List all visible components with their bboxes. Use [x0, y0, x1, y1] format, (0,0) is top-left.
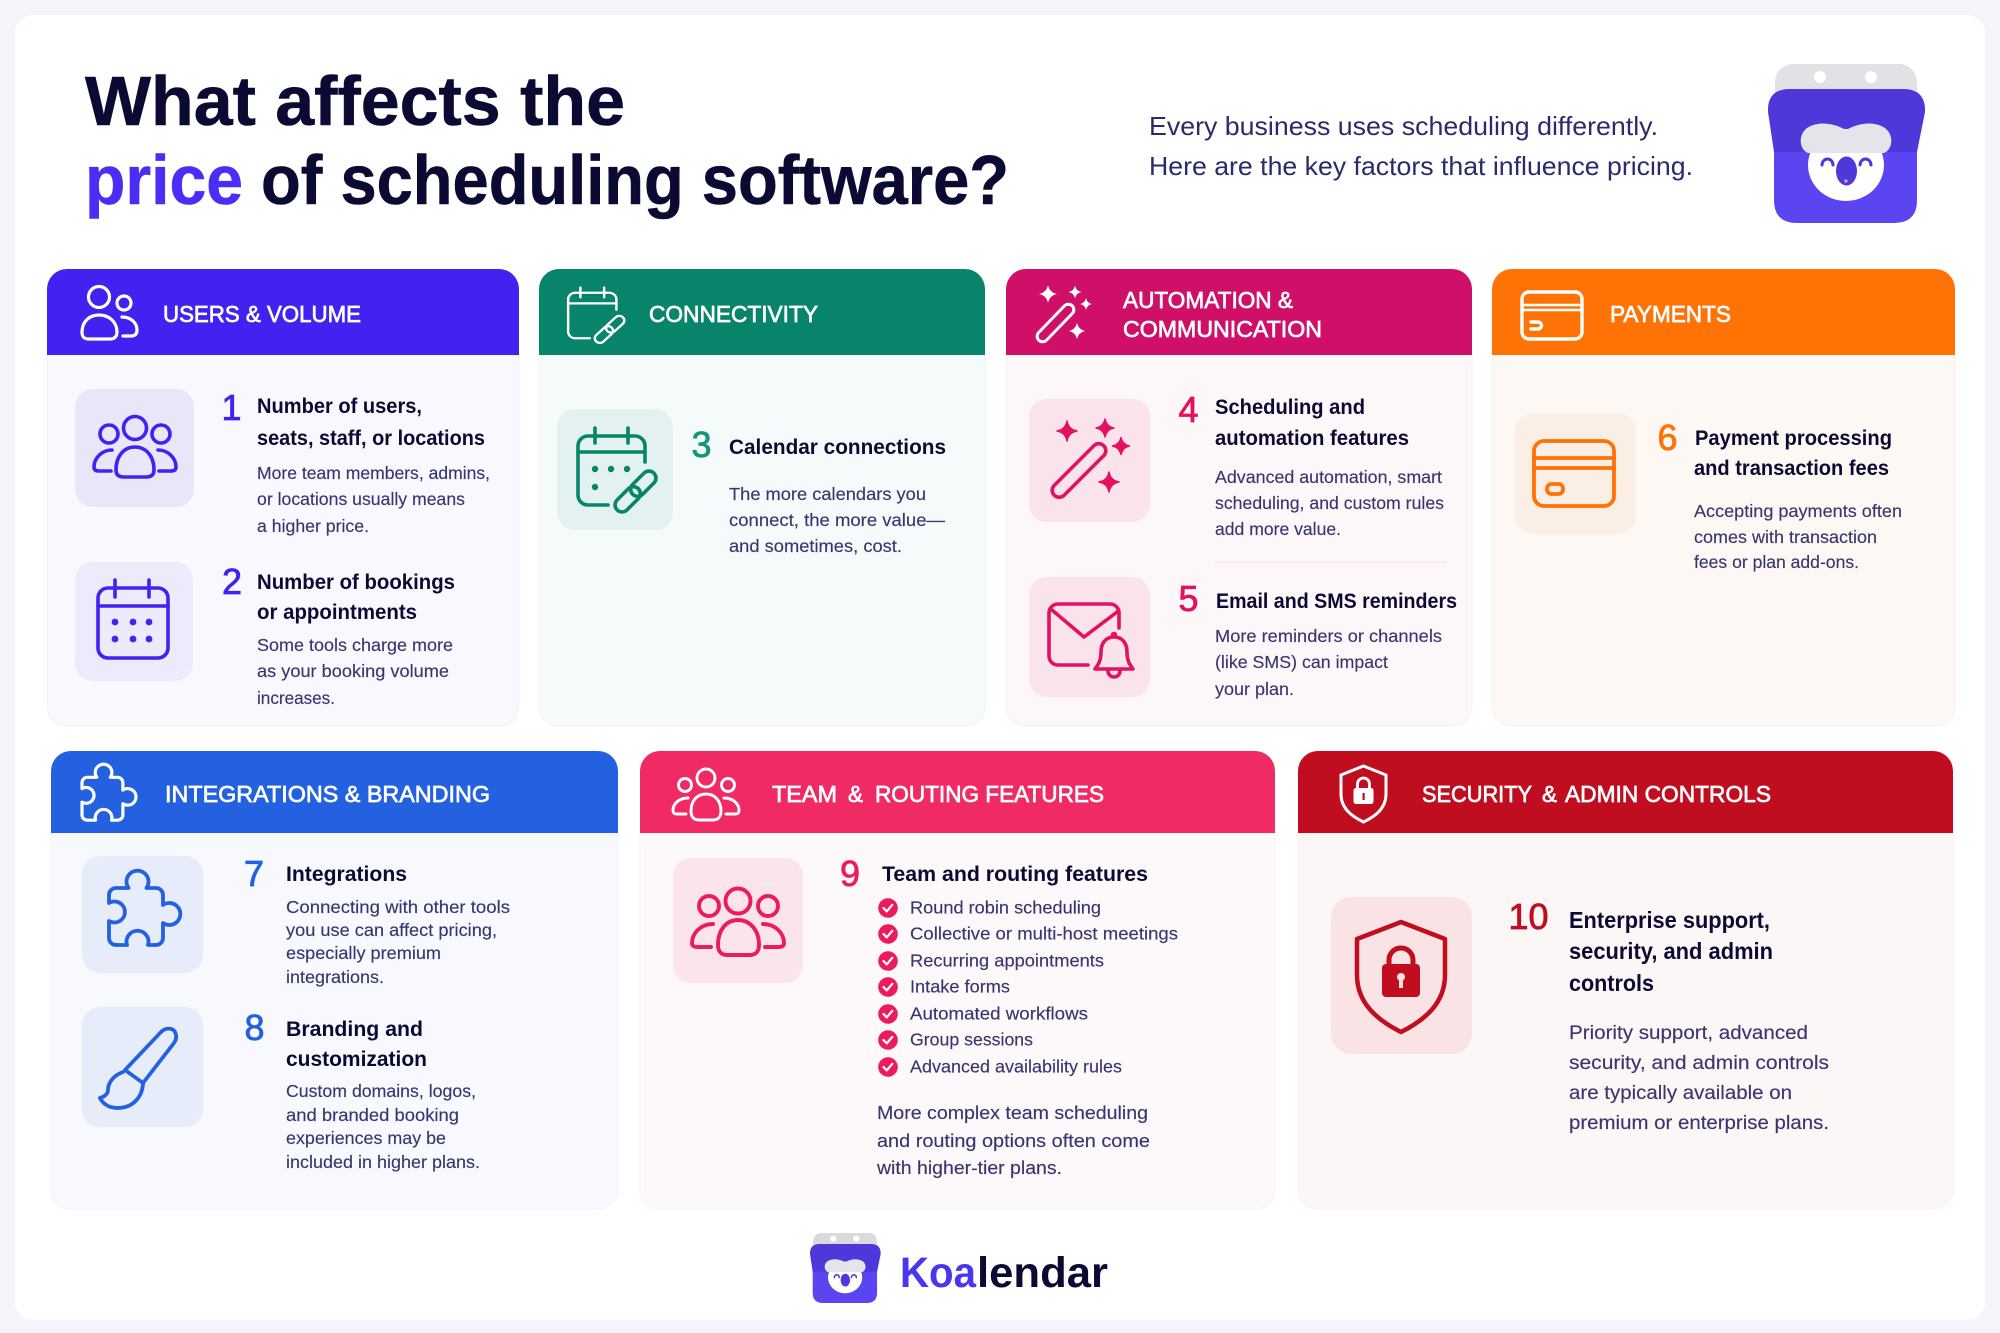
- panel: payments: [1492, 269, 1955, 726]
- factor 10: 10: [1508, 896, 1548, 937]
- factor 6: and transaction fees: [1694, 457, 1889, 480]
- panel: automation and communication: [1006, 269, 1472, 726]
- factor 9: Team and routing features: [882, 863, 1148, 886]
- title: of scheduling software?: [261, 141, 1009, 219]
- header: integrations and branding: [51, 751, 618, 833]
- header: integrations and branding: INTEGRATIONS & BRANDING: [165, 781, 490, 807]
- icon box: credit card: [1515, 413, 1636, 534]
- factor 10: security, and admin controls: [1569, 1052, 1829, 1074]
- icon: Koalendar koala calendar logo: [1768, 64, 1925, 223]
- footer wordmark: [900, 1249, 1108, 1297]
- factor 2: 2: [222, 561, 242, 602]
- factor 5: Email and SMS reminders: [1216, 590, 1457, 613]
- footer wordmark: lendar: [977, 1249, 1108, 1297]
- icon: group of people: [673, 769, 739, 820]
- icon box: magic wand: [1029, 399, 1150, 522]
- panel: users and volume: [47, 269, 519, 726]
- icon box: group of people: [673, 858, 803, 983]
- checklist: Advanced availability rules: [910, 1057, 1122, 1077]
- factor 1: a higher price.: [257, 516, 369, 536]
- factor 1: or locations usually means: [257, 489, 465, 509]
- factor 1: [221, 387, 490, 536]
- factor 6: fees or plan add-ons.: [1694, 552, 1859, 572]
- header: payments: [1492, 269, 1955, 355]
- icon box: email with bell: [1029, 577, 1150, 697]
- panel: integrations and branding: [51, 751, 618, 1209]
- factor 10: security, and admin: [1569, 938, 1773, 964]
- icon: calendar with link: [568, 287, 626, 345]
- team features note: [876, 1102, 1150, 1178]
- checklist: [878, 898, 1178, 1077]
- factor 3: The more calendars you: [729, 484, 926, 504]
- factor 10: are typically available on: [1569, 1082, 1792, 1104]
- icon: shield with lock: [1341, 766, 1386, 822]
- tagline: [1149, 111, 1693, 181]
- factor 5: your plan.: [1215, 679, 1294, 699]
- factor 1: More team members, admins,: [257, 463, 490, 483]
- checklist: Round robin scheduling: [910, 898, 1101, 918]
- header: security and admin controls: ADMIN CONTROLS: [1565, 781, 1771, 807]
- icon: magic wand: [1035, 285, 1092, 344]
- factor 9: 9: [840, 853, 860, 894]
- factor 8: [244, 1007, 480, 1172]
- header: team and routing features: &: [848, 781, 863, 807]
- factor 3: connect, the more value—: [729, 510, 946, 530]
- factor 4: Scheduling and: [1215, 396, 1365, 419]
- team features note: with higher-tier plans.: [876, 1157, 1062, 1178]
- factor 5: 5: [1178, 578, 1199, 619]
- team features note: More complex team scheduling: [877, 1102, 1148, 1123]
- factor 6: 6: [1657, 417, 1678, 458]
- factor 1: Number of users,: [257, 395, 422, 418]
- header: security and admin controls: SECURITY: [1422, 781, 1532, 807]
- checklist: Recurring appointments: [910, 951, 1104, 971]
- factor 10: Enterprise support,: [1569, 907, 1770, 933]
- factor 4: automation features: [1215, 427, 1409, 450]
- factor 2: Some tools charge more: [257, 635, 453, 655]
- title: [85, 62, 1009, 219]
- factor 8: included in higher plans.: [286, 1152, 480, 1172]
- factor 7: Connecting with other tools: [286, 897, 510, 917]
- factor 8: experiences may be: [286, 1128, 446, 1148]
- checklist: Automated workflows: [910, 1004, 1088, 1024]
- icon box: paint brush: [82, 1007, 203, 1127]
- header: connectivity: [539, 269, 985, 355]
- factor 8: Custom domains, logos,: [286, 1081, 476, 1101]
- factor 4: [1178, 389, 1444, 539]
- tagline: Here are the key factors that influence pricing.: [1149, 151, 1693, 181]
- icon: two people: [82, 286, 137, 339]
- title: price: [85, 141, 243, 219]
- icon box: group of people: [75, 389, 194, 507]
- factor 10: premium or enterprise plans.: [1569, 1112, 1829, 1134]
- factor 5: (like SMS) can impact: [1215, 652, 1388, 672]
- factor 3: Calendar connections: [729, 436, 946, 459]
- team features note: and routing options often come: [877, 1130, 1150, 1151]
- checklist: Group sessions: [910, 1030, 1033, 1050]
- factor 3: [691, 424, 946, 556]
- factor 7: Integrations: [286, 863, 407, 886]
- factor 4: add more value.: [1215, 519, 1341, 539]
- factor 2: [222, 561, 455, 708]
- header: users and volume: [47, 269, 519, 355]
- header: connectivity: CONNECTIVITY: [649, 301, 818, 327]
- factor 3: 3: [691, 424, 712, 465]
- title: What affects the: [85, 62, 625, 140]
- factor 1: seats, staff, or locations: [257, 427, 485, 450]
- header: team and routing features: TEAM: [772, 781, 837, 807]
- factor 7: especially premium: [286, 943, 441, 963]
- checklist: Collective or multi-host meetings: [910, 924, 1178, 944]
- factor 8: Branding and: [286, 1018, 423, 1041]
- header: team and routing features: [640, 751, 1275, 833]
- factor 9: [840, 853, 1148, 894]
- checklist: Intake forms: [910, 977, 1010, 997]
- factor 7: [244, 853, 510, 987]
- icon: credit card: [1522, 292, 1582, 339]
- factor 4: 4: [1178, 389, 1199, 430]
- factor 6: comes with transaction: [1694, 527, 1877, 547]
- factor 7: 7: [244, 853, 264, 894]
- factor 10: Priority support, advanced: [1569, 1022, 1808, 1044]
- factor 6: Accepting payments often: [1694, 501, 1902, 521]
- factor 6: [1657, 417, 1902, 572]
- factor 10: controls: [1569, 970, 1654, 996]
- tagline: Every business uses scheduling differently.: [1149, 111, 1658, 141]
- panel: connectivity: [539, 269, 985, 726]
- icon box: shield with lock: [1331, 897, 1472, 1054]
- factor 3: and sometimes, cost.: [729, 536, 902, 556]
- header: team and routing features: ROUTING FEATURES: [875, 781, 1104, 807]
- header: automation and communication: [1006, 269, 1472, 355]
- factor 2: Number of bookings: [257, 571, 455, 594]
- factor 8: and branded booking: [286, 1105, 459, 1125]
- factor 7: integrations.: [286, 967, 384, 987]
- factor 8: 8: [244, 1007, 265, 1048]
- icon box: calendar with link: [557, 409, 673, 530]
- header: users and volume: USERS & VOLUME: [163, 301, 361, 327]
- factor 5: [1178, 578, 1457, 699]
- header: automation and communication: AUTOMATION &: [1123, 287, 1293, 313]
- icon box: calendar: [75, 562, 193, 681]
- factor 1: 1: [221, 387, 242, 428]
- header: security and admin controls: &: [1542, 781, 1557, 807]
- header: payments: PAYMENTS: [1610, 301, 1731, 327]
- factor 2: increases.: [257, 688, 335, 708]
- factor 2: or appointments: [257, 601, 417, 624]
- footer logo icon: [810, 1233, 881, 1303]
- footer wordmark: Koa: [900, 1249, 977, 1297]
- factor 4: Advanced automation, smart: [1215, 467, 1442, 487]
- factor 5: More reminders or channels: [1215, 626, 1442, 646]
- factor 10: [1508, 896, 1829, 1134]
- icon: puzzle piece: [82, 764, 136, 820]
- header: automation and communication: COMMUNICATION: [1123, 316, 1322, 342]
- panel: team and routing features: [640, 751, 1275, 1209]
- panel: security and admin controls: [1298, 751, 1953, 1209]
- factor 8: customization: [286, 1048, 427, 1071]
- header: security and admin controls: [1298, 751, 1953, 833]
- factor 2: as your booking volume: [257, 661, 449, 681]
- icon box: puzzle piece: [82, 856, 203, 973]
- factor 7: you use can affect pricing,: [286, 920, 497, 940]
- factor 4: scheduling, and custom rules: [1215, 493, 1444, 513]
- factor 6: Payment processing: [1695, 427, 1892, 450]
